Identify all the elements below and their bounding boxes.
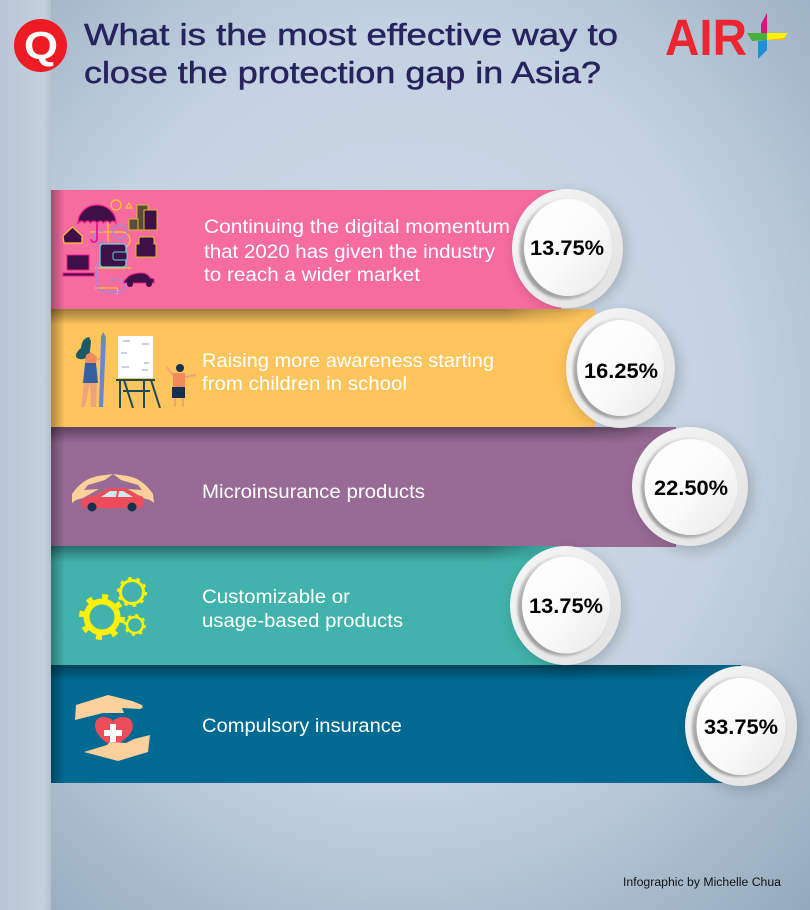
- left strip: [0, 0, 51, 910]
- icon: Q logo: [14, 19, 67, 72]
- callout: 13.75% teal: 13.75%: [529, 595, 603, 618]
- title: close the protection gap in Asia?: [84, 55, 601, 90]
- panel: teal bar: usage-based products: [202, 610, 403, 632]
- title: What is the most effective way to: [84, 17, 618, 52]
- panel: yellow bar: from children in school: [202, 373, 407, 395]
- panel: pink bar: to reach a wider market: [204, 264, 421, 286]
- label: Raising more awareness starting: [202, 350, 494, 372]
- label: Continuing the digital momentum: [204, 216, 510, 238]
- callout: 16.25% yellow: 16.25%: [584, 360, 658, 383]
- callout: 13.75% pink: [512, 189, 625, 310]
- panel: pink bar: that 2020 has given the industry: [204, 241, 495, 263]
- callout: 16.25% yellow: [566, 308, 678, 430]
- title: [84, 17, 618, 90]
- panel: blue bar: [51, 665, 741, 783]
- callout: 33.75% blue: [685, 666, 799, 789]
- callout: 13.75% pink: 13.75%: [530, 237, 604, 260]
- callout: 33.75% blue: 33.75%: [704, 716, 778, 739]
- label: Compulsory insurance: [202, 715, 402, 737]
- icon: digital lifestyle collage: [63, 200, 157, 294]
- panel: teal bar: [51, 546, 561, 666]
- icon: teacher and child at a board: [76, 332, 196, 408]
- label: Customizable or: [202, 586, 351, 608]
- icon: hands protecting car: [72, 474, 154, 512]
- icon: gears: [82, 578, 146, 638]
- callout: 22.50% purple: 22.50%: [654, 477, 728, 500]
- icon: AIR+ logo: AIR: [665, 9, 747, 66]
- label: Microinsurance products: [202, 481, 425, 503]
- icon: Q logo: Q: [24, 25, 58, 68]
- icon: hands holding heart: [75, 695, 150, 761]
- panel: pink bar: [51, 190, 561, 309]
- panel: purple bar: [51, 427, 676, 547]
- callout: 13.75% teal: [510, 546, 623, 668]
- credit: Infographic by Michelle Chua: [623, 877, 782, 889]
- callout: 22.50% purple: [632, 427, 751, 550]
- panel: yellow bar: [51, 309, 595, 428]
